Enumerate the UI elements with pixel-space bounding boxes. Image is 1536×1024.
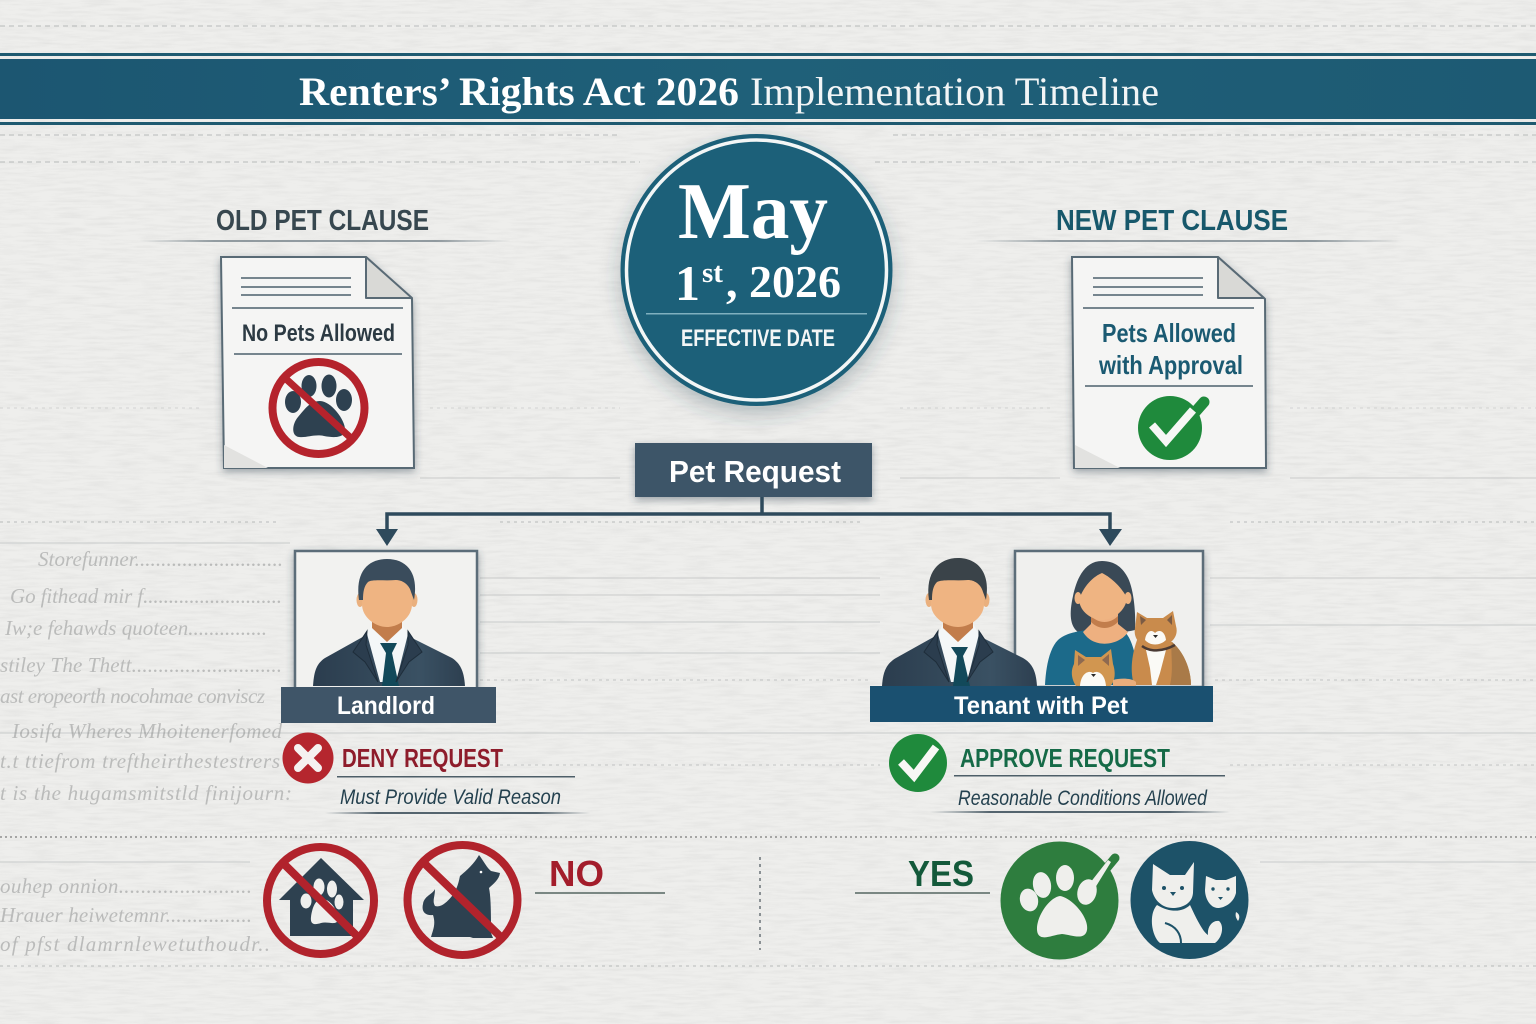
icon: red cross [282, 732, 334, 784]
handwriting background text: Hrauer heiwetemnr................ [0, 903, 252, 927]
document: no pets allowed [221, 257, 414, 468]
approve request outcome: APPROVE REQUEST [960, 743, 1170, 773]
effective date badge: EFFECTIVE DATE [681, 325, 835, 352]
panel: tenant with pet [870, 551, 1213, 722]
title banner: Renters’ Rights Act 2026 [299, 69, 739, 114]
icon: cat front [1072, 649, 1136, 686]
deny request outcome: DENY REQUEST [342, 743, 503, 773]
label: tenant with pet [870, 686, 1213, 722]
handwriting background text: Iw;e fehawds quoteen............... [4, 616, 267, 640]
icon: no dogs [408, 845, 518, 955]
handwriting background text: of pfst dlamrnlewetuthoudr.. [0, 932, 270, 956]
handwriting background text: t is the hugamsmitstld finijourn: [0, 781, 292, 805]
panel: landlord [281, 551, 496, 723]
label: yes [855, 853, 990, 894]
approve request outcome [889, 734, 1230, 813]
icon: woman with cats [1045, 561, 1191, 686]
handwriting background text: ouhep onnion........................ [0, 874, 252, 898]
divider [759, 857, 761, 950]
heading: old pet clause: OLD PET CLAUSE [216, 205, 429, 237]
flow arrows [376, 497, 1122, 546]
effective date badge: 1 [675, 255, 700, 311]
pet request box: Pet Request [669, 454, 841, 489]
document: pets allowed with approval [1072, 257, 1266, 468]
title banner [0, 53, 1536, 125]
handwriting background text: stiley The Thett............................ [0, 653, 282, 677]
icon: no pets in house [267, 847, 374, 954]
deny request outcome: Must Provide Valid Reason [340, 786, 561, 809]
handwriting background text: Storefunner............................ [38, 547, 283, 571]
icon: green check [889, 734, 947, 792]
document: no pets allowed: No Pets Allowed [242, 320, 395, 347]
document: pets allowed with approval: with Approval [1098, 350, 1243, 380]
handwriting background text [0, 547, 292, 956]
handwriting background text: Go fithead mir f........................... [10, 584, 282, 608]
label: landlord: Landlord [337, 692, 435, 720]
pet request box [635, 443, 872, 497]
icon: cat sitting [1132, 611, 1191, 685]
icon: green check [1138, 396, 1204, 460]
label: landlord [281, 687, 496, 723]
icon: cat and kitten [1130, 841, 1248, 959]
document: pets allowed with approval: Pets Allowed [1102, 318, 1236, 348]
label: no [535, 853, 665, 894]
handwriting background text: t.t ttiefrom treftheirthestestrers [0, 749, 280, 773]
icon: landlord portrait [313, 559, 465, 686]
icon: prohibited paw [272, 362, 364, 454]
effective date badge: st [702, 257, 723, 289]
handwriting background text: ast eropeorth nocohmae conviscz [0, 684, 265, 708]
heading: new pet clause: NEW PET CLAUSE [1056, 205, 1288, 237]
icon: man portrait [882, 558, 1037, 686]
effective date badge: May [678, 168, 828, 256]
deny request outcome [282, 732, 590, 814]
handwriting background text: Iosifa Wheres Mhoitenerfomed [11, 719, 282, 743]
label: no: NO [549, 853, 604, 894]
effective date badge [620, 134, 892, 406]
title banner: Implementation Timeline [750, 69, 1159, 114]
label: tenant with pet: Tenant with Pet [954, 692, 1129, 720]
label: yes: YES [908, 853, 974, 894]
effective date badge: , 2026 [726, 256, 841, 307]
icon: pets allowed paw [1000, 842, 1118, 960]
approve request outcome: Reasonable Conditions Allowed [958, 787, 1208, 810]
